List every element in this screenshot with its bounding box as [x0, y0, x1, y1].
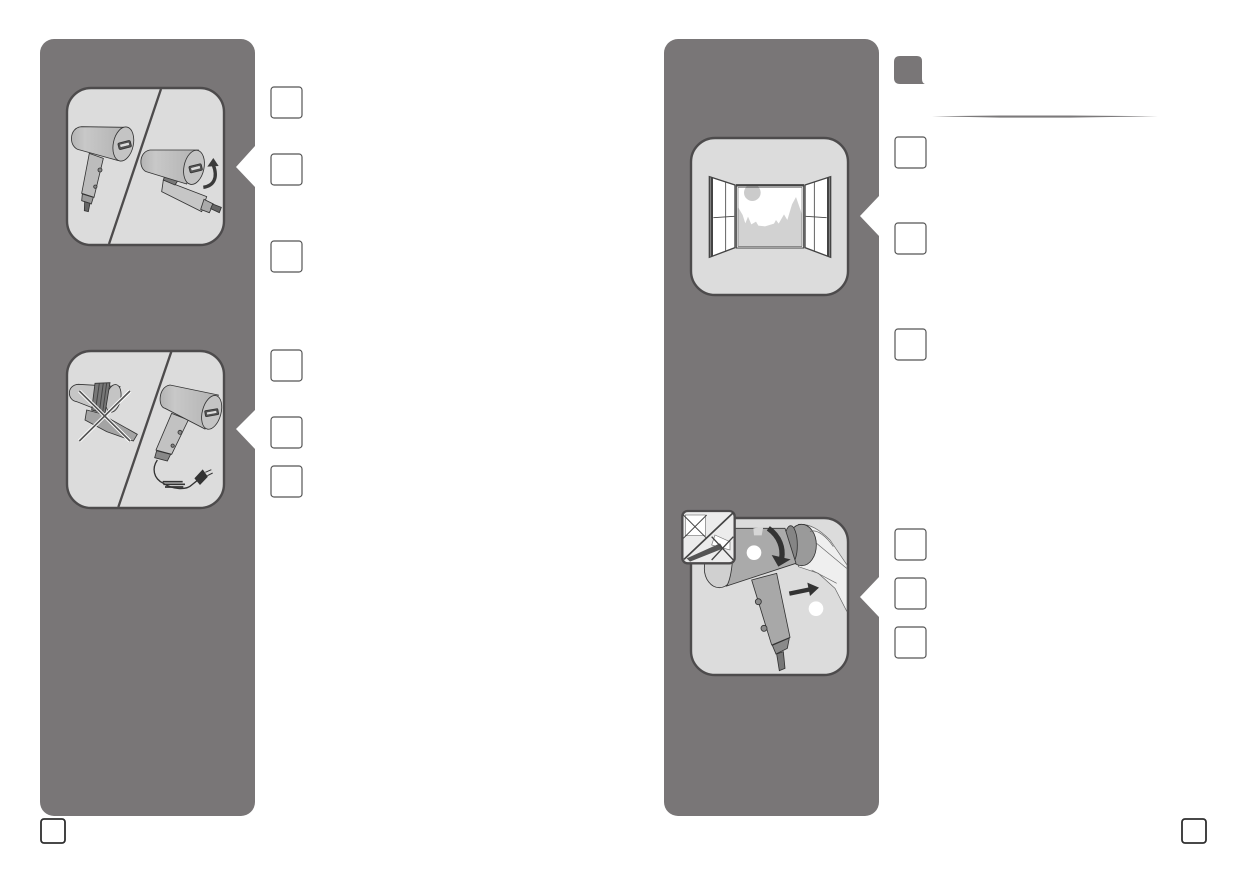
step marker b	[809, 601, 823, 616]
heading underline	[932, 116, 1158, 118]
window frame	[709, 177, 831, 257]
inset: unplug warning	[682, 511, 735, 563]
right shutter	[805, 177, 831, 257]
notch: lower left card pointer	[236, 410, 255, 449]
illustration card: open window	[691, 138, 848, 295]
left shutter	[709, 177, 735, 257]
icon: dryer with wrapped cord, crossed out	[69, 383, 137, 441]
icon: dryer with loose cord	[154, 385, 225, 489]
illustration card: hand twisting dryer	[682, 511, 848, 675]
panel: right sidebar	[664, 39, 879, 816]
tab	[753, 527, 763, 535]
arrow: pull	[789, 583, 819, 596]
icon: dryer body	[704, 524, 816, 671]
scene outside window	[737, 184, 803, 248]
step marker a	[747, 545, 761, 560]
checkbox column: left page	[271, 87, 302, 497]
icon: upright dryer	[71, 125, 137, 212]
notch: lower right card pointer	[860, 577, 879, 617]
illustration card: dryer unfolded and folded	[67, 88, 224, 245]
page number box: right	[1182, 819, 1206, 843]
checkbox column: right page	[895, 137, 926, 658]
notch: upper left card pointer	[236, 146, 255, 187]
section marker: grey tab	[894, 56, 925, 84]
notch: upper right card pointer	[860, 196, 879, 236]
icon: folded dryer	[141, 148, 221, 213]
divider line	[109, 89, 161, 244]
panel: left sidebar	[40, 39, 255, 816]
hand fingers	[810, 531, 847, 583]
page number box: left	[41, 819, 65, 843]
arrow: fold direction	[203, 158, 219, 187]
icon: hand	[798, 524, 847, 612]
illustration card: cord wrapped versus cord loose	[67, 351, 225, 508]
arrow: rotate	[768, 528, 791, 567]
divider line	[118, 352, 171, 507]
